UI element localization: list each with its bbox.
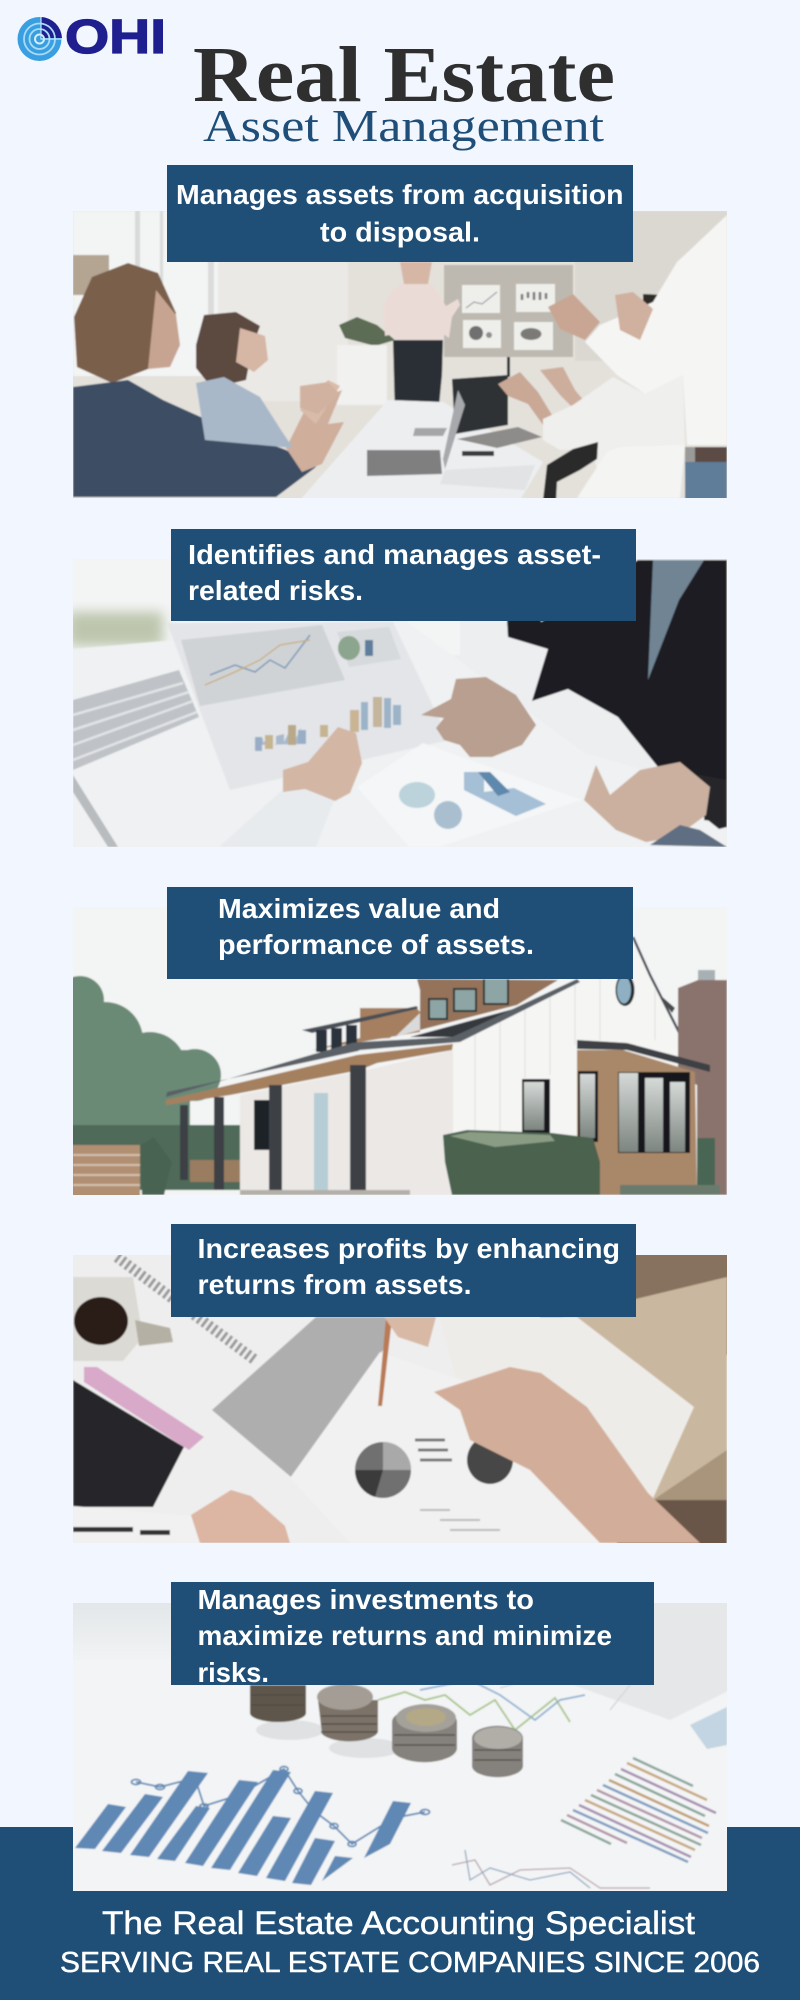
caption box: Manages assets from acquisition — [176, 179, 624, 210]
caption box — [171, 1582, 654, 1688]
subtitle: Asset Management — [203, 100, 604, 151]
sub: trees — [55, 976, 221, 1130]
sub: front hedges — [443, 1130, 720, 1195]
sub: black book and pink marker — [73, 1367, 204, 1507]
logo: OHI — [18, 11, 166, 64]
sub: house — [166, 937, 683, 1195]
logo wordmark: OHI — [65, 11, 166, 64]
sub: lower hand — [73, 1490, 290, 1543]
panel: profits — [60, 1224, 740, 1555]
caption box: Manages investments to — [198, 1584, 534, 1615]
photo: white farmhouse — [73, 907, 727, 1195]
caption box — [167, 165, 633, 262]
sub: blue bar chart — [75, 1770, 411, 1885]
caption box: related risks. — [188, 575, 363, 606]
footer band — [0, 1827, 800, 2000]
caption box: Maximizes value and — [218, 893, 500, 924]
sub: coffee mug and spiral notebook — [73, 1257, 255, 1361]
panel: value and performance — [55, 887, 740, 1205]
sub: folder — [439, 1317, 694, 1543]
sub: hand and pencil — [378, 1317, 700, 1543]
sub: seated man — [73, 263, 344, 497]
sub: line chart behind coins — [378, 1680, 585, 1730]
caption box: Increases profits by enhancing — [198, 1233, 620, 1264]
caption box: risks. — [198, 1657, 269, 1688]
sub: trend line — [132, 1766, 430, 1846]
icon: concentric target — [18, 17, 62, 61]
photo: reviewing charts at a table — [73, 559, 727, 847]
sub: dormers — [312, 1007, 420, 1050]
caption box — [171, 529, 636, 621]
sub: dark suit — [506, 560, 727, 829]
caption box: maximize returns and minimize — [198, 1620, 612, 1651]
sub: paper with charts — [167, 622, 449, 790]
caption box: to disposal. — [320, 216, 480, 248]
sub: multicolour horizontal bars — [561, 1758, 716, 1862]
sub: grey document — [212, 1317, 388, 1477]
title: Real Estate — [193, 32, 615, 119]
caption box: Identifies and manages asset- — [188, 539, 601, 570]
sub: chimney — [678, 970, 727, 1195]
caption box — [167, 887, 633, 979]
footer statement: SERVING REAL ESTATE COMPANIES SINCE 2006 — [60, 1947, 760, 1979]
panel: investments — [60, 1582, 740, 1900]
caption box: performance of assets. — [218, 929, 534, 960]
sub: wood bay window — [577, 1040, 710, 1195]
sub: lower report — [357, 743, 582, 847]
footer tagline: The Real Estate Accounting Specialist — [102, 1905, 695, 1941]
photo: coins on financial charts — [73, 1603, 727, 1891]
sub: striped sleeves — [73, 670, 337, 847]
panel: risk management — [60, 529, 740, 860]
sub: white report — [290, 1352, 640, 1543]
panel: acquisition to disposal — [60, 165, 740, 510]
sub: lower line chart — [452, 1850, 650, 1888]
sub: hedge and fence — [60, 1125, 240, 1200]
sub: presenter — [383, 262, 460, 429]
caption box: returns from assets. — [198, 1269, 472, 1300]
sub: hands — [283, 677, 727, 847]
sub: presentation board — [444, 265, 573, 377]
table — [300, 400, 543, 500]
sub: porch roof — [166, 979, 580, 1097]
photo: team applauding presenter — [73, 211, 727, 498]
photo: hand on financial report — [73, 1255, 727, 1543]
sub: sofa — [540, 1245, 740, 1550]
sub: coin stacks — [250, 1684, 523, 1777]
sub: applauding colleagues — [498, 215, 727, 502]
sub: seated woman — [196, 312, 340, 448]
caption box — [171, 1224, 636, 1317]
